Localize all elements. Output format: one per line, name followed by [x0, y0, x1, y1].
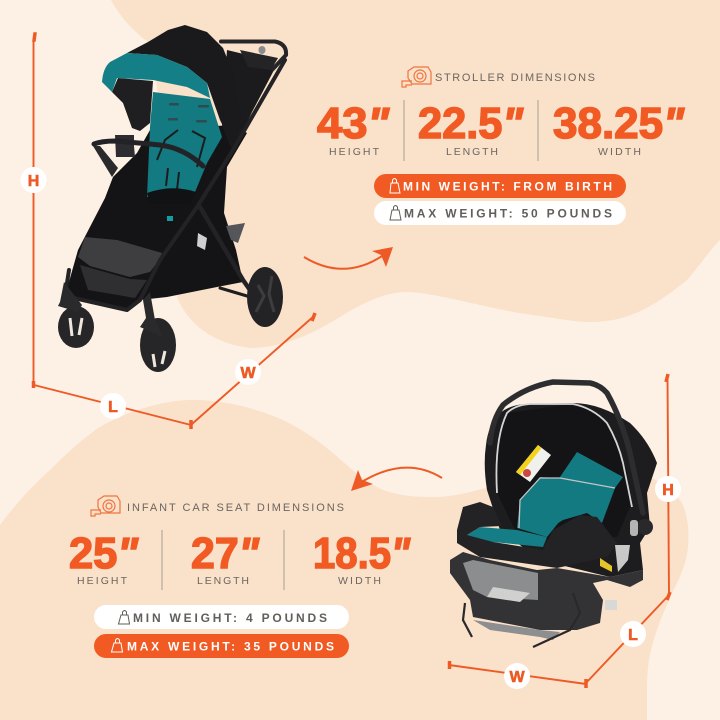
canopy interior	[112, 78, 153, 131]
car seat width dimension line: W	[509, 669, 525, 686]
front right wheel	[140, 292, 176, 372]
stat: length: LENGTH	[446, 146, 498, 158]
side bolster and footwell	[457, 502, 617, 568]
pill: car seat minimum weight: MIN WEIGHT: 4 POUNDS	[133, 611, 327, 625]
tray leg and cup holder	[93, 146, 118, 177]
pill: stroller maximum weight: MAX WEIGHT: 50 POUNDS	[404, 206, 612, 220]
footrest leather	[78, 237, 162, 277]
stroller heading	[402, 67, 595, 87]
pill: stroller minimum weight	[374, 174, 626, 198]
stat: length: 22.5"	[418, 99, 524, 148]
carry handle	[490, 382, 643, 513]
car seat height dimension line: H	[662, 482, 674, 499]
stroller body silhouette	[65, 125, 247, 310]
stat: length: LENGTH	[197, 575, 249, 587]
car seat length dimension line	[586, 592, 670, 688]
canopy	[127, 25, 241, 143]
stat: height: HEIGHT	[329, 146, 380, 158]
arrow: car seat details	[351, 468, 442, 491]
base release	[463, 560, 538, 600]
stat: width: 18.5"	[313, 529, 411, 578]
car seat length dimension line: L	[628, 627, 638, 644]
pill: car seat maximum weight: MAX WEIGHT: 35 POUNDS	[127, 640, 334, 654]
pill: stroller minimum weight: MIN WEIGHT: FROM BIRTH	[403, 180, 612, 194]
canopy teal brim	[102, 53, 210, 98]
carrier hinge	[615, 545, 630, 572]
stroller width dimension line: W	[240, 365, 256, 382]
stat: height: HEIGHT	[77, 575, 128, 587]
car seat height dimension line	[655, 374, 681, 595]
background blob: top right	[111, 0, 720, 348]
canopy interior	[497, 405, 630, 540]
seat back fabric	[547, 452, 623, 530]
rear canopy panel	[222, 50, 273, 153]
stroller heading: STROLLER DIMENSIONS	[435, 72, 595, 84]
stroller dimension stats	[317, 99, 685, 161]
base	[450, 552, 643, 630]
stat: width: WIDTH	[598, 146, 641, 158]
stat: length: 27"	[191, 529, 260, 578]
push handle	[221, 42, 286, 70]
car seat heading: INFANT CAR SEAT DIMENSIONS	[127, 502, 344, 514]
footrest well	[80, 265, 147, 298]
stroller illustration	[58, 25, 286, 372]
rear wheel	[247, 267, 283, 327]
stroller width dimension line	[192, 313, 315, 424]
stroller height dimension line: H	[28, 173, 39, 190]
car seat heading	[91, 496, 344, 516]
front left wheel	[58, 282, 94, 348]
canopy trim	[496, 404, 632, 507]
icon: tape measure	[91, 496, 120, 516]
adjuster dial	[637, 519, 653, 535]
carrier shell	[485, 403, 657, 577]
arrow: stroller details	[304, 247, 393, 269]
seat fabric trim	[519, 478, 615, 528]
parent tray	[240, 50, 278, 70]
seat back fabric	[147, 92, 222, 197]
belt strap	[463, 593, 580, 647]
stroller height dimension line	[20, 33, 46, 388]
pill: car seat minimum weight	[94, 605, 349, 629]
stroller length dimension line	[34, 385, 191, 429]
base foot	[473, 620, 560, 640]
child tray bar	[94, 141, 203, 166]
background blob: bottom	[0, 400, 688, 720]
stroller length dimension line: L	[108, 399, 118, 416]
icon: tape measure	[402, 67, 431, 87]
car seat width dimension line	[449, 661, 586, 689]
stat: height: 43"	[317, 99, 390, 148]
logo label	[197, 233, 207, 250]
stat: height: 25"	[69, 529, 139, 578]
stat: width: 38.25"	[553, 99, 685, 148]
pill: car seat maximum weight	[94, 634, 349, 658]
car seat illustration	[450, 382, 657, 647]
seat pad	[467, 527, 547, 547]
rear basket tray	[226, 223, 245, 243]
side label	[605, 600, 617, 610]
car seat dimension stats	[69, 529, 411, 590]
base hook	[600, 558, 612, 572]
pill: stroller maximum weight	[374, 201, 626, 225]
stat: width: WIDTH	[338, 575, 381, 587]
warning label	[516, 445, 551, 482]
frame bars	[65, 60, 285, 310]
harness straps	[157, 130, 205, 190]
